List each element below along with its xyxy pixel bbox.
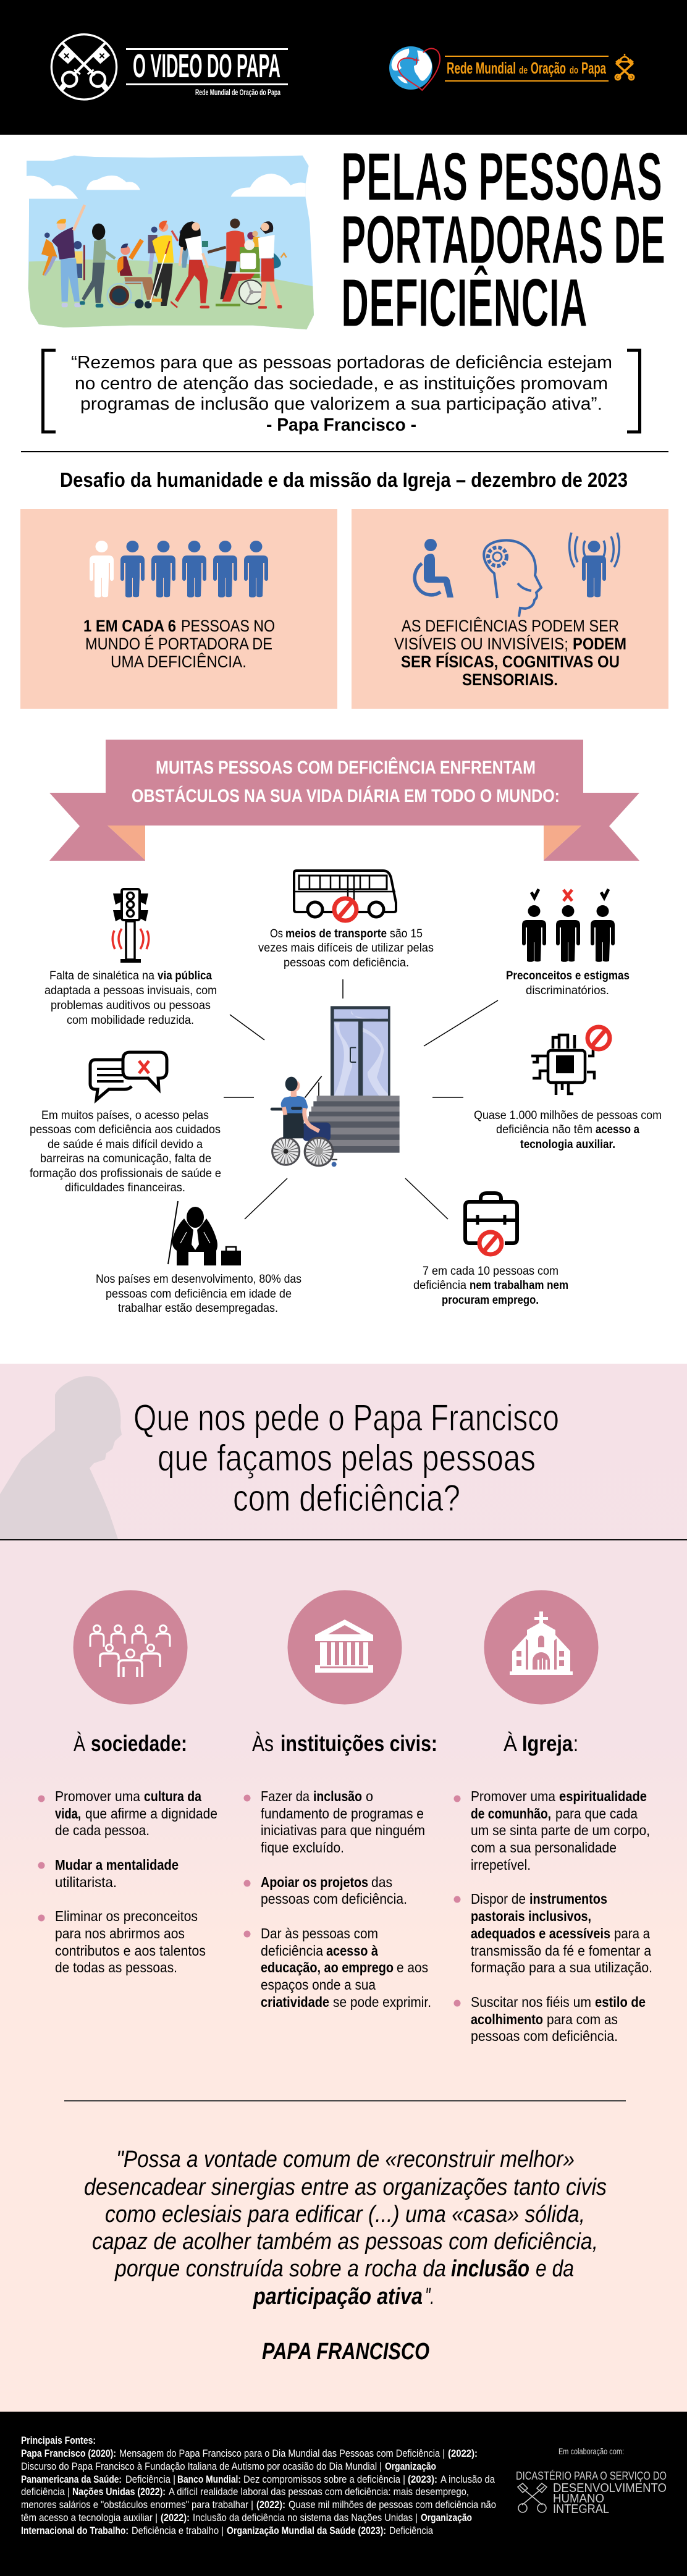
silhouette: Pope in profile <box>0 1376 122 1539</box>
bullets: inclusão <box>313 1788 362 1804</box>
bullets: que afirme a dignidade <box>85 1805 217 1822</box>
bullets: educação, ao emprego <box>261 1959 394 1975</box>
bullets: fundamento de programas e <box>261 1805 424 1822</box>
sources: Deficiência <box>389 2525 433 2536</box>
bullets: adequados e acessíveis <box>471 1925 610 1941</box>
network wordmark: do <box>570 64 578 76</box>
bullets: pessoas com deficiência. <box>261 1891 407 1907</box>
icon: traffic light <box>112 889 149 963</box>
figure: woman in white and red <box>171 221 209 308</box>
bullets: deficiência <box>261 1943 323 1959</box>
unemployment text <box>96 1273 301 1315</box>
statistic text: MUNDO É PORTADORA DE <box>85 635 272 653</box>
obstacle: unemployment <box>96 1201 301 1315</box>
sources: Panamericana da Saúde: <box>21 2473 122 2485</box>
bullets: acesso à <box>326 1943 378 1959</box>
figure: woman in green <box>80 224 115 308</box>
statistic text <box>83 617 275 671</box>
connector lines <box>224 979 498 1219</box>
health care text <box>30 1109 221 1194</box>
sources: Deficiência e trabalho | <box>132 2525 224 2536</box>
closing quote: capaz de acolher também as pessoas com deficiência, <box>92 2229 598 2255</box>
footer band <box>0 2412 687 2576</box>
bullets: espaços onde a sua <box>261 1977 376 1993</box>
section heading <box>133 1397 559 1519</box>
network wordmark: Papa <box>581 59 606 77</box>
icon: head with gear <box>484 540 541 617</box>
sources: deficiência | <box>21 2486 70 2498</box>
bullets: Apoiar os projetos <box>261 1874 368 1890</box>
logo wordmark: O VIDEO DO PAPA <box>133 48 280 85</box>
icon: church circle <box>484 1590 598 1704</box>
column heading: À <box>504 1731 517 1756</box>
logo wordmark <box>126 48 288 97</box>
column: society <box>38 1731 217 1975</box>
not working text: procuram emprego. <box>442 1294 539 1307</box>
column: civil institutions <box>243 1731 437 2010</box>
icon: speech bubbles <box>90 1052 167 1100</box>
column heading: À <box>74 1731 85 1756</box>
bullets <box>38 1788 217 1975</box>
bullets: formação para a sua utilização. <box>471 1959 652 1975</box>
health care text: barreiras na comunicação, falta de <box>40 1152 211 1165</box>
network wordmark: Rede Mundial <box>447 59 516 77</box>
sources: Deficiência | <box>125 2473 175 2485</box>
technology text <box>474 1109 662 1151</box>
bullets: se pode exprimir. <box>333 1994 431 2010</box>
closing quote: e da <box>536 2256 574 2282</box>
bullets: com a sua personalidade <box>471 1839 617 1856</box>
obstacle: prejudice <box>506 889 630 997</box>
sources: Principais Fontes: <box>21 2435 96 2446</box>
icon: bus with prohibition sign <box>294 871 396 921</box>
network wordmark: de <box>519 64 528 76</box>
bullets: pastorais inclusivos, <box>471 1908 591 1924</box>
obstacle: public road signals <box>44 889 217 1027</box>
column heading: : <box>573 1731 578 1756</box>
figure: woman with backpack <box>258 221 282 309</box>
road signals text <box>44 969 217 1027</box>
bullets: para a <box>614 1925 650 1941</box>
column heading: sociedade: <box>91 1731 187 1756</box>
bullets: utilitarista. <box>55 1874 117 1890</box>
health care text: Em muitos países, o acesso pelas <box>41 1109 209 1122</box>
bullets: de comunhão, <box>471 1805 551 1822</box>
icon: wheelchair user <box>415 539 453 598</box>
illustration: diverse group of people outdoors <box>27 156 314 329</box>
sources: Quase mil milhões de pessoas com deficiência não <box>289 2499 496 2511</box>
collaboration logo: DESENVOLVIMENTO <box>553 2481 667 2495</box>
closing quote: porque construída sobre a rocha da <box>114 2256 446 2282</box>
panel: 1 in 6 people <box>20 509 337 709</box>
column heading: instituições civis: <box>280 1731 437 1756</box>
bullets: Suscitar nos fiéis um <box>471 1994 591 2010</box>
statistic text: UMA DEFICIÊNCIA. <box>111 652 247 671</box>
sources: (2023): <box>408 2473 437 2485</box>
closing quote: inclusão <box>451 2256 529 2282</box>
closing quote: desencadear sinergias entre as organizações tanto civis <box>84 2174 607 2200</box>
closing quote: participação ativa <box>253 2284 423 2310</box>
road signals text: com mobilidade reduzida. <box>67 1014 194 1027</box>
sources: Banco Mundial: <box>177 2473 241 2485</box>
subheading: Desafio da humanidade e da missão da Igreja – dezembro de 2023 <box>60 468 628 491</box>
quote with brackets <box>43 350 640 435</box>
disability types text <box>394 616 626 689</box>
bullets: Promover uma <box>55 1788 140 1804</box>
ribbon banner: OBSTÁCULOS NA SUA VIDA DIÁRIA EM TODO O MUNDO: <box>132 785 560 806</box>
collaboration logo: HUMANO <box>553 2492 604 2506</box>
bullets: para nos abrirmos aos <box>55 1925 185 1941</box>
bullets: das <box>371 1874 392 1890</box>
closing quote: "Possa a vontade comum de «reconstruir melhor» <box>116 2147 575 2173</box>
bullets: de todas as pessoas. <box>55 1959 177 1975</box>
disability types text: AS DEFICIÊNCIAS PODEM SER <box>402 616 619 635</box>
icon: globe and heart <box>389 46 440 90</box>
sources: Organização <box>385 2460 436 2472</box>
prejudice text: Preconceitos e estigmas <box>506 969 630 982</box>
transport text: pessoas com deficiência. <box>284 956 409 969</box>
icon: person with sound waves <box>570 533 619 598</box>
technology text: deficiência não têm <box>496 1123 592 1136</box>
bullets: Promover uma <box>471 1788 555 1804</box>
quote with brackets: “Rezemos para que as pessoas portadoras de deficiência estejam <box>71 353 612 373</box>
icon: civil institutions circle <box>288 1590 402 1704</box>
section background: what the Pope asks <box>0 1364 687 2412</box>
prejudice text: discriminatórios. <box>526 984 609 997</box>
sources: (2022): <box>161 2512 190 2523</box>
quote with brackets: - Papa Francisco - <box>266 415 416 435</box>
quote with brackets: programas de inclusão que valorizem a sua participação ativa”. <box>80 394 602 414</box>
section heading: que façamos pelas pessoas <box>158 1437 536 1479</box>
bullets: pessoas com deficiência. <box>471 2028 618 2044</box>
sources: Inclusão da deficiência no sistema das Nações Unidas | <box>193 2512 418 2523</box>
bullets: e aos <box>397 1959 428 1975</box>
obstacle: assistive technology <box>474 1027 662 1151</box>
central illustration: wheelchair user facing stairs <box>272 1006 400 1167</box>
ribbon banner: MUITAS PESSOAS COM DEFICIÊNCIA ENFRENTAM <box>156 757 536 778</box>
logo wordmark: Rede Mundial de Oração do Papa <box>195 87 280 97</box>
bullets: iniciativas para que ninguém <box>261 1822 425 1838</box>
obstacle: transport <box>258 871 434 969</box>
ribbon banner <box>49 740 639 861</box>
sources: Dez compromissos sobre a deficiência | <box>243 2473 405 2485</box>
bullets: irrepetível. <box>471 1857 531 1873</box>
bullets: Eliminar os preconceitos <box>55 1908 198 1924</box>
sources: Internacional do Trabalho: <box>21 2525 129 2536</box>
health care text: formação dos profissionais de saúde e <box>30 1167 221 1180</box>
closing quote <box>84 2147 607 2310</box>
figure: waving person <box>52 205 85 307</box>
disability types text: SENSORIAIS. <box>462 670 558 689</box>
sources: Organização Mundial da Saúde (2023): <box>227 2525 386 2536</box>
technology text: acesso a <box>596 1123 639 1136</box>
health care text: de saúde é mais difícil devido a <box>48 1138 203 1151</box>
header band <box>0 0 687 135</box>
column heading: Às <box>252 1731 274 1756</box>
transport text: são 15 <box>390 927 423 940</box>
disability types text: PODEM <box>573 635 626 653</box>
icon: dejected man with briefcase <box>168 1201 241 1265</box>
bullets: vida, <box>55 1805 81 1822</box>
icon: papal keys <box>615 54 634 80</box>
unemployment text: trabalhar estão desempregadas. <box>118 1302 278 1315</box>
title <box>341 139 665 341</box>
sources: Discurso do Papa Francisco à Fundação Italiana de Autismo por ocasião do Dia Mundial | <box>21 2460 382 2472</box>
bullets: instrumentos <box>529 1891 607 1907</box>
icon: society circle <box>73 1590 188 1704</box>
network wordmark: Oração <box>531 59 566 77</box>
background figures <box>41 227 287 280</box>
statistic text: PESSOAS NO <box>181 617 275 635</box>
unemployment text: Nos países em desenvolvimento, 80% das <box>96 1273 301 1286</box>
road signals text: Falta de sinalética na <box>49 969 154 982</box>
technology text: Quase 1.000 milhões de pessoas com <box>474 1109 662 1122</box>
stairs <box>308 1096 400 1153</box>
bullets: Dispor de <box>471 1891 526 1907</box>
technology text: tecnologia auxiliar. <box>520 1138 615 1151</box>
icon: six people, one highlighted <box>90 541 268 598</box>
closing quote: ". <box>425 2284 434 2310</box>
bullets: fique excluído. <box>261 1839 344 1856</box>
bullets: criatividade <box>261 1994 329 2010</box>
column heading: Igreja <box>522 1731 573 1756</box>
road signals text: adaptada a pessoas invisuais, com <box>44 984 217 997</box>
bullets: Mudar a mentalidade <box>55 1857 179 1873</box>
statistic text: 1 EM CADA 6 <box>83 617 176 635</box>
transport text: Os <box>270 927 283 940</box>
health care text: pessoas com deficiência aos cuidados <box>30 1123 221 1136</box>
bullets: para com as <box>547 2011 618 2027</box>
bullets <box>453 1788 652 2044</box>
sources: menores salários e "obstáculos enormes" para trabalhar | <box>21 2499 253 2511</box>
figure: blind man with cane <box>150 221 174 306</box>
icon: three people with marks <box>522 889 615 962</box>
door <box>331 1006 390 1096</box>
sources: Nações Unidas (2022): <box>72 2486 166 2498</box>
network wordmark <box>445 56 609 82</box>
column: Church <box>453 1731 652 2044</box>
sources: (2022): <box>256 2499 285 2511</box>
figure: man in wheelchair <box>107 240 154 308</box>
transport text: meios de transporte <box>285 927 387 940</box>
obstacle: health care <box>30 1052 221 1194</box>
bullets: o <box>366 1788 373 1804</box>
road signals text: problemas auditivos ou pessoas <box>51 999 211 1012</box>
collaboration logo: INTEGRAL <box>553 2502 609 2516</box>
disability types text: SER FÍSICAS, COGNITIVAS OU <box>401 652 620 671</box>
sources: Papa Francisco (2020): <box>21 2447 116 2459</box>
prejudice text <box>506 969 630 997</box>
not working text: deficiência <box>413 1279 466 1292</box>
sources: (2022): <box>448 2447 478 2459</box>
bullets: estilo de <box>595 1994 646 2010</box>
sources: A inclusão da <box>440 2473 495 2485</box>
bullets: contributos e aos talentos <box>55 1943 206 1959</box>
sources: Organização <box>421 2512 472 2523</box>
transport text <box>258 927 434 969</box>
section heading: com deficiência? <box>233 1477 460 1519</box>
sources <box>21 2435 496 2536</box>
bullets: para que cada <box>555 1805 638 1822</box>
person in wheelchair <box>272 1077 337 1167</box>
panel: types of disability <box>352 509 668 709</box>
section heading: Que nos pede o Papa Francisco <box>133 1397 559 1438</box>
disability types text: VISÍVEIS OU INVISÍVEIS; <box>394 635 568 653</box>
bullets: Dar às pessoas com <box>261 1925 378 1941</box>
closing quote: como eclesiais para edificar (...) uma «casa» sólida, <box>105 2202 585 2228</box>
bullets: de cada pessoa. <box>55 1822 150 1838</box>
quote attribution: PAPA FRANCISCO <box>262 2339 429 2365</box>
road signals text: via pública <box>158 969 212 982</box>
collaboration logo: Em colaboração com: <box>558 2446 624 2456</box>
transport text: vezes mais difíceis de utilizar pelas <box>258 942 434 955</box>
not working text: nem trabalham nem <box>470 1279 568 1292</box>
figure: elderly person in wheelchair <box>216 240 263 306</box>
bullets: um se sinta parte de um corpo, <box>471 1822 650 1838</box>
icon: chip with prohibition sign <box>531 1027 610 1095</box>
obstacle: not working <box>413 1193 568 1307</box>
sources: A difícil realidade laboral das pessoas com deficiência: mais desemprego, <box>169 2486 469 2498</box>
bullets: espiritualidade <box>559 1788 647 1804</box>
icon: briefcase with prohibition sign <box>465 1193 517 1254</box>
icon: dicastery keys <box>518 2483 547 2512</box>
quote with brackets: no centro de atenção das sociedade, e as instituições promovam <box>75 374 608 394</box>
bullets: transmissão da fé e fomentar a <box>471 1943 651 1959</box>
not working text <box>413 1265 568 1307</box>
sources: têm acesso a tecnologia auxiliar | <box>21 2512 158 2523</box>
health care text: dificuldades financeiras. <box>65 1181 185 1194</box>
bullets: Fazer da <box>261 1788 310 1804</box>
not working text: 7 em cada 10 pessoas com <box>423 1265 558 1278</box>
unemployment text: pessoas com deficiência em idade de <box>106 1288 292 1301</box>
bullets <box>243 1788 431 2010</box>
bullets: cultura da <box>144 1788 201 1804</box>
sources: Mensagem do Papa Francisco para o Dia Mundial das Pessoas com Deficiência | <box>119 2447 445 2459</box>
collaboration logo <box>516 2446 667 2516</box>
bullets: acolhimento <box>471 2011 543 2027</box>
figure: man in red shirt <box>208 219 245 299</box>
icon: crossed keys logo <box>51 35 117 99</box>
